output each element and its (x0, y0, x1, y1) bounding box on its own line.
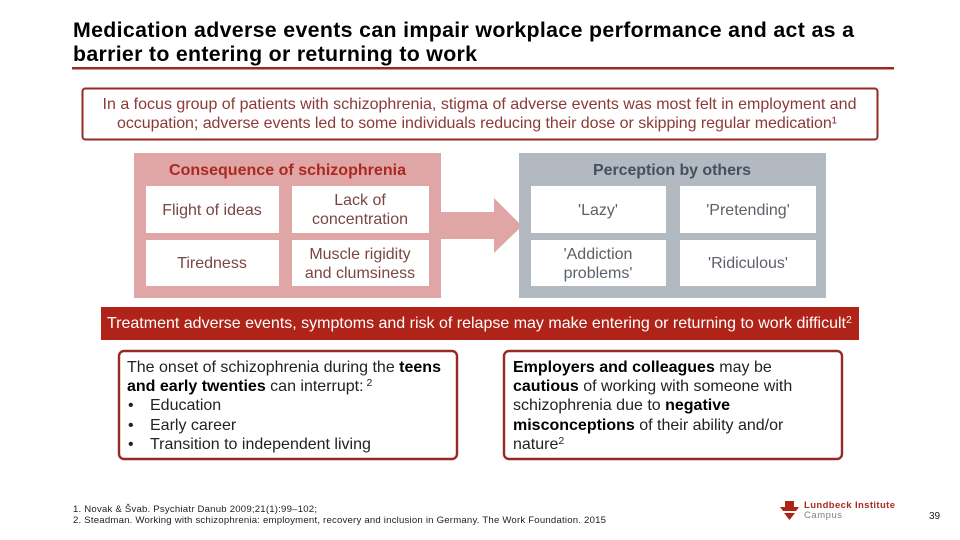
heading: consequence of schizophrenia: Consequence of schizophrenia (169, 162, 406, 179)
heading: perception by others: Perception by others (593, 162, 751, 179)
text box: employers and colleagues: 2 (558, 435, 564, 447)
title rule (72, 67, 894, 70)
banner: treatment adverse events (101, 307, 859, 340)
logo: Lundbeck Institute Campus: Lundbeck Institute (804, 500, 895, 511)
page number: 39 (929, 511, 941, 522)
banner: treatment adverse events: 2 (846, 314, 852, 326)
cell: lack of concentration: Lack of (334, 192, 386, 209)
cell: pretending: 'Pretending' (706, 202, 790, 219)
text box: onset of schizophrenia: The onset of schizophrenia during the teens (127, 359, 441, 376)
text box: onset of schizophrenia (119, 351, 457, 459)
cell: pretending (680, 186, 816, 233)
text box: onset of schizophrenia: • (128, 397, 134, 414)
text box: onset of schizophrenia: • (128, 436, 134, 453)
text box: onset of schizophrenia: Early career (150, 417, 237, 434)
banner: treatment adverse events: Treatment adverse events, symptoms and risk of relapse may make entering or returning to work difficult (107, 315, 846, 332)
text box: onset of schizophrenia: Education (150, 397, 221, 414)
references: 1. Novak & Švab. Psychiatr Danub 2009;21(1):99–102; (73, 504, 317, 515)
panel: perception by others (519, 153, 826, 298)
text box: employers and colleagues: misconceptions of their ability and/or (513, 417, 784, 434)
text box: employers and colleagues: nature (513, 436, 558, 453)
logo: Lundbeck Institute Campus (780, 500, 895, 521)
cell: addiction problems (531, 240, 666, 286)
callout: focus group finding: occupation; adverse events led to some individuals reducing their dose or skipping regular medication¹ (117, 115, 837, 132)
cell: addiction problems: problems' (564, 265, 632, 282)
title: Medication adverse events can impair workplace performance and act as a (73, 18, 854, 42)
cell: tiredness: Tiredness (177, 255, 247, 272)
arrow: consequence to perception (441, 198, 522, 253)
cell: muscle rigidity (292, 240, 429, 286)
cell: addiction problems: 'Addiction (564, 246, 632, 263)
text box: employers and colleagues (504, 351, 842, 459)
callout: focus group finding (82, 88, 878, 140)
cell: ridiculous: 'Ridiculous' (708, 255, 788, 272)
cell: lack of concentration (292, 186, 429, 233)
cell: lack of concentration: concentration (312, 211, 408, 228)
text box: employers and colleagues: Employers and colleagues may be (513, 359, 772, 376)
cell: lazy (531, 186, 666, 233)
cell: ridiculous (680, 240, 816, 286)
text box: onset of schizophrenia: • (128, 417, 134, 434)
references (73, 504, 606, 526)
cell: muscle rigidity: Muscle rigidity (309, 246, 411, 263)
cell: lazy: 'Lazy' (578, 202, 618, 219)
text box: employers and colleagues: schizophrenia due to negative (513, 397, 730, 414)
cell: flight of ideas (146, 186, 279, 233)
logo: Lundbeck Institute Campus: Campus (804, 510, 842, 521)
text box: onset of schizophrenia: Transition to independent living (150, 436, 371, 453)
panel: consequence of schizophrenia (134, 153, 441, 298)
text box: onset of schizophrenia: 2 (364, 377, 372, 389)
icon: logo mark (780, 501, 799, 520)
cell: flight of ideas: Flight of ideas (162, 202, 262, 219)
title: barrier to entering or returning to work (73, 42, 477, 66)
cell: muscle rigidity: and clumsiness (305, 265, 415, 282)
callout: focus group finding: In a focus group of patients with schizophrenia, stigma of adverse events was most felt in employment and (102, 96, 856, 113)
text box: employers and colleagues: cautious of working with someone with (513, 378, 792, 395)
references: 2. Steadman. Working with schizophrenia: employment, recovery and inclusion in Germany. The Work Foundation. 2015 (73, 515, 606, 526)
cell: tiredness (146, 240, 279, 286)
title (73, 18, 854, 66)
text box: onset of schizophrenia: and early twenties can interrupt: (127, 378, 364, 395)
